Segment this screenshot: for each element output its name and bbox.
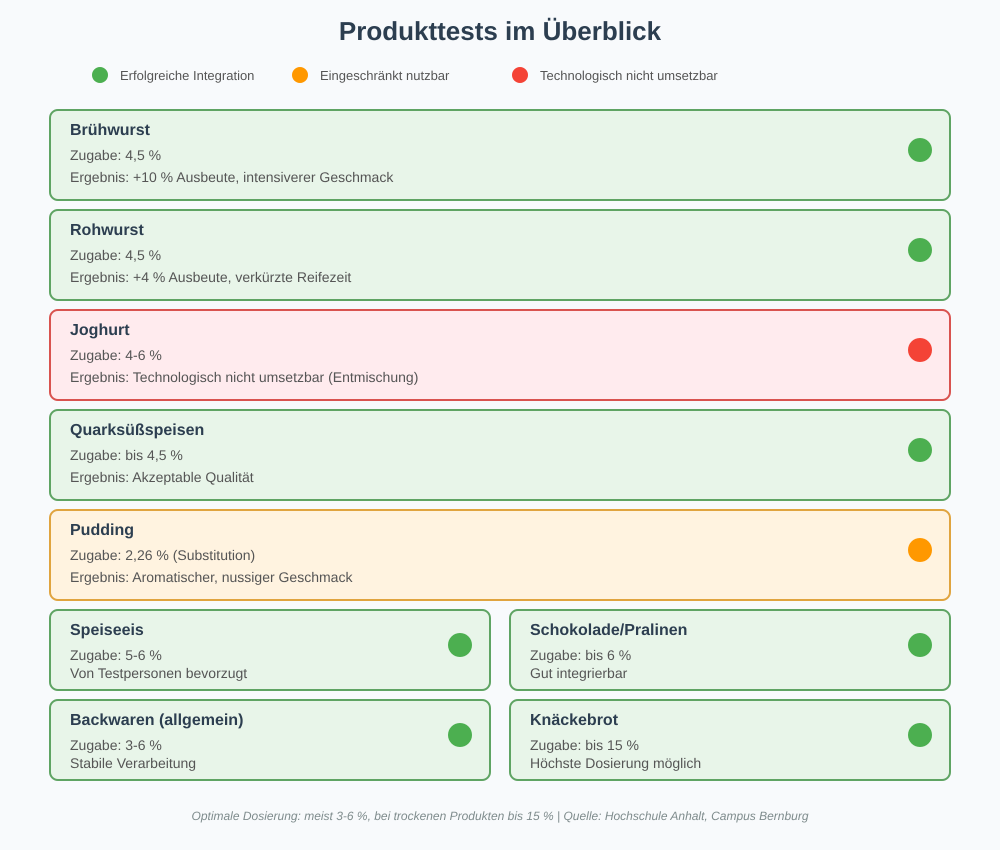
panel: Backwaren: Zugabe: 3-6 % (70, 737, 162, 753)
panel: Rohwurst: Zugabe: 4,5 % (70, 247, 161, 263)
panel: Knäckebrot (509, 699, 951, 781)
footer note: Optimale Dosierung: meist 3-6 %, bei trockenen Produkten bis 15 % | Quelle: Hochschule Anhalt, Campus Bernburg (192, 809, 808, 823)
panel: Brühwurst: Brühwurst (70, 122, 150, 139)
panel: Speiseeis: Speiseeis (70, 622, 144, 639)
panel: Knäckebrot: Knäckebrot (530, 712, 618, 729)
panel: Schokolade/Pralinen: Gut integrierbar (530, 665, 627, 681)
panel: Joghurt: Joghurt (70, 322, 130, 339)
panel: Quarksüßspeisen: Quarksüßspeisen (70, 422, 204, 439)
panel: Knäckebrot: Höchste Dosierung möglich (530, 755, 701, 771)
legend item: successful integration: Erfolgreiche Integration (120, 68, 254, 83)
panel: Schokolade/Pralinen (509, 609, 951, 691)
panel: Quarksüßspeisen (49, 409, 951, 501)
panel: Brühwurst: Zugabe: 4,5 % (70, 147, 161, 163)
panel: Rohwurst (49, 209, 951, 301)
panel: Backwaren: Backwaren (allgemein) (70, 712, 243, 729)
panel: Speiseeis: Zugabe: 5-6 % (70, 647, 162, 663)
panel: Speiseeis: Von Testpersonen bevorzugt (70, 665, 247, 681)
panel: Pudding: Ergebnis: Aromatischer, nussiger Geschmack (70, 569, 352, 585)
panel: Backwaren: Stabile Verarbeitung (70, 755, 196, 771)
panel: Rohwurst: Rohwurst (70, 222, 144, 239)
panel: Pudding: Zugabe: 2,26 % (Substitution) (70, 547, 255, 563)
legend item: not feasible: Technologisch nicht umsetzbar (540, 68, 718, 83)
panel: Joghurt: Ergebnis: Technologisch nicht umsetzbar (Entmischung) (70, 369, 418, 385)
panel: Knäckebrot: Zugabe: bis 15 % (530, 737, 639, 753)
panel: Rohwurst: Ergebnis: +4 % Ausbeute, verkürzte Reifezeit (70, 269, 351, 285)
legend item: limited use: Eingeschränkt nutzbar (320, 68, 449, 83)
panel: Pudding: Pudding (70, 522, 134, 539)
panel: Brühwurst (49, 109, 951, 201)
panel: Pudding (49, 509, 951, 601)
panel: Backwaren (49, 699, 491, 781)
panel: Quarksüßspeisen: Zugabe: bis 4,5 % (70, 447, 183, 463)
panel: Schokolade/Pralinen: Zugabe: bis 6 % (530, 647, 631, 663)
panel: Brühwurst: Ergebnis: +10 % Ausbeute, intensiverer Geschmack (70, 169, 393, 185)
panel: Joghurt: Zugabe: 4-6 % (70, 347, 162, 363)
panel: Speiseeis (49, 609, 491, 691)
panel: Joghurt (49, 309, 951, 401)
panel: Schokolade/Pralinen: Schokolade/Pralinen (530, 622, 687, 639)
title: Produkttests im Überblick (339, 16, 661, 46)
legend (92, 67, 718, 83)
panel: Quarksüßspeisen: Ergebnis: Akzeptable Qualität (70, 469, 254, 485)
